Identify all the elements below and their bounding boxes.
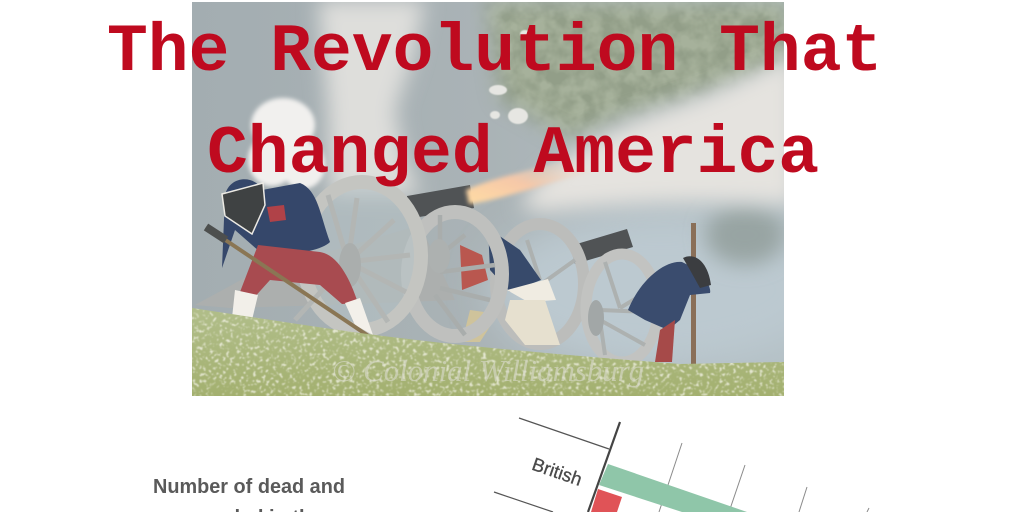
cannon smoke plume [520, 55, 795, 212]
blue-grey lower backdrop [485, 212, 784, 364]
title [107, 14, 882, 193]
gridlines [659, 443, 869, 512]
chart heading: Number of dead and [153, 476, 345, 498]
rotated bar chart [494, 418, 869, 512]
right soldier and pole [628, 223, 711, 367]
front wheel [295, 182, 421, 330]
middle wheel [408, 212, 502, 336]
main cannon barrel [407, 185, 474, 219]
rising smoke column [318, 0, 425, 195]
cannon carriage [196, 286, 452, 308]
front soldier [206, 179, 373, 337]
title: Changed America [207, 116, 819, 193]
far cannon and wheels [496, 224, 658, 362]
vertical axis [588, 422, 620, 512]
muzzle flame [466, 158, 590, 204]
photo: colonial soldiers firing cannons [192, 0, 830, 396]
category separators [494, 418, 609, 512]
title: The Revolution That [107, 14, 882, 91]
grass field [192, 300, 784, 396]
bar: British dead and wounded [599, 464, 747, 512]
white smoke puff [248, 98, 325, 189]
leaf gap speckles [489, 30, 530, 124]
photo background haze [192, 2, 784, 396]
middle soldier [460, 228, 560, 345]
chart heading [153, 476, 345, 512]
tree foliage [480, 2, 784, 144]
bar: British second series [591, 489, 622, 512]
watermark: © Colonial Williamsburg [332, 353, 644, 388]
category label: British: British [529, 453, 585, 490]
dark tree blotches [705, 205, 785, 265]
